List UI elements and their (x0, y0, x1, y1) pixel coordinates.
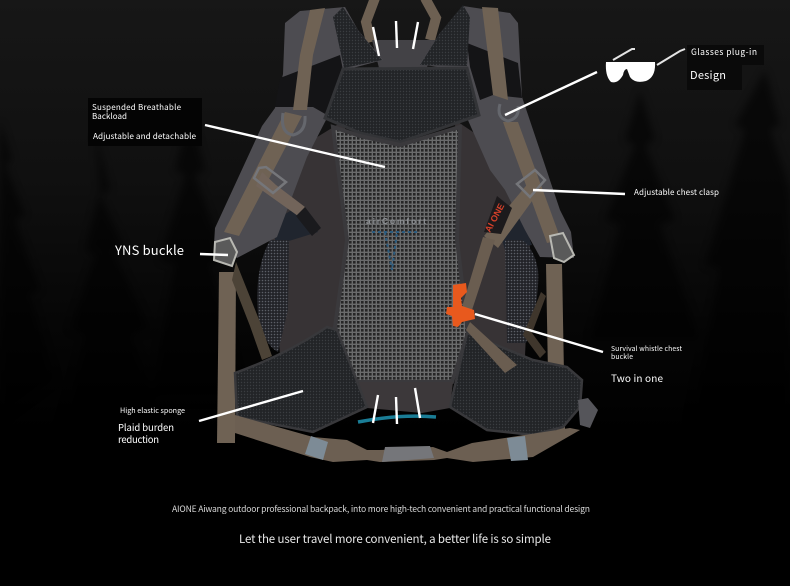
right chest buckle (517, 170, 545, 197)
bottom panel (354, 382, 453, 413)
AIONE red label (484, 196, 512, 234)
right D-ring (499, 104, 518, 121)
text: suspended breathable backload: Suspended Breathable (92, 102, 182, 113)
left hip pad (235, 327, 367, 432)
text: survival whistle chest buckle: Survival whistle chest (611, 343, 682, 353)
right shoulder mesh (420, 5, 470, 66)
left cross strap (256, 172, 305, 216)
comfort logo: airComfort (366, 216, 426, 226)
right shoulder strap (420, 6, 574, 258)
icon: sunglasses (606, 49, 685, 82)
left D-ring (282, 113, 305, 135)
text: high elastic sponge: Plaid burden (118, 420, 174, 434)
right chest strap (484, 175, 540, 248)
right hip pad (450, 333, 582, 435)
navy inner right (500, 215, 532, 250)
left shoulder strap (214, 7, 383, 258)
text: survival whistle chest buckle: buckle (611, 351, 633, 361)
grey tab left (305, 436, 328, 460)
hip side buckle (578, 398, 598, 428)
grid back panel (333, 127, 468, 382)
bottom caption: AIONE Aiwang outdoor professional backpack, into more high-tech convenient and practical functional design (172, 503, 590, 515)
left thin strap (232, 262, 272, 360)
bottom tagline: Let the user travel more convenient, a better life is so simple (239, 531, 551, 547)
left shoulder mesh (333, 7, 382, 68)
AIONE label text: AI ONE (483, 202, 506, 234)
text: high elastic sponge (118, 406, 185, 446)
orange whistle buckle (446, 283, 475, 327)
text: survival whistle chest buckle: Two in one (611, 370, 663, 385)
top handle (366, 0, 436, 42)
side pocket right (505, 240, 538, 343)
left clip (296, 207, 321, 236)
left side buckle (214, 238, 237, 266)
hip belt (235, 415, 580, 462)
right side buckle (550, 233, 574, 262)
right strap webbing (482, 7, 561, 243)
left chest buckle (254, 167, 286, 193)
label box backing: glasses (687, 45, 764, 90)
strap above whistle (462, 237, 495, 310)
left body panel (272, 120, 345, 356)
right shoulder black band (467, 43, 522, 100)
backpack (214, 0, 598, 462)
left shoulder black band (275, 55, 343, 115)
waist strap diagonal (466, 322, 517, 373)
right thin strap (523, 292, 546, 358)
blue logo mark (372, 232, 420, 270)
right vertical strap (546, 264, 565, 430)
text: YNS buckle: YNS buckle (114, 240, 184, 259)
text: adjustable chest clasp: Adjustable chest clasp (634, 187, 719, 198)
callout lines (199, 21, 625, 424)
upper mesh panel (325, 68, 479, 142)
text: high elastic sponge: High elastic sponge (120, 406, 185, 416)
right body panel (455, 120, 530, 356)
left strap webbing (224, 8, 325, 236)
text: glasses plug-in design: Glasses plug-in (691, 46, 757, 58)
blue zipper (358, 416, 436, 422)
navy inner left (272, 205, 318, 245)
rear panel behind handle (372, 40, 438, 72)
text: high elastic sponge: reduction (118, 432, 159, 446)
text: glasses plug-in design: Design (690, 67, 726, 83)
label box backing: breathable backload (88, 98, 202, 146)
grey tab right (507, 436, 528, 461)
text: suspended breathable backload: Adjustable and detachable (93, 130, 196, 142)
text: glasses plug-in design (690, 46, 757, 83)
text: survival whistle chest buckle (611, 343, 682, 385)
left vertical strap (217, 272, 236, 443)
side pocket left (257, 240, 289, 352)
center waist buckle (382, 446, 434, 462)
text: suspended breathable backload (92, 102, 196, 142)
text: suspended breathable backload: Backload (92, 111, 127, 122)
